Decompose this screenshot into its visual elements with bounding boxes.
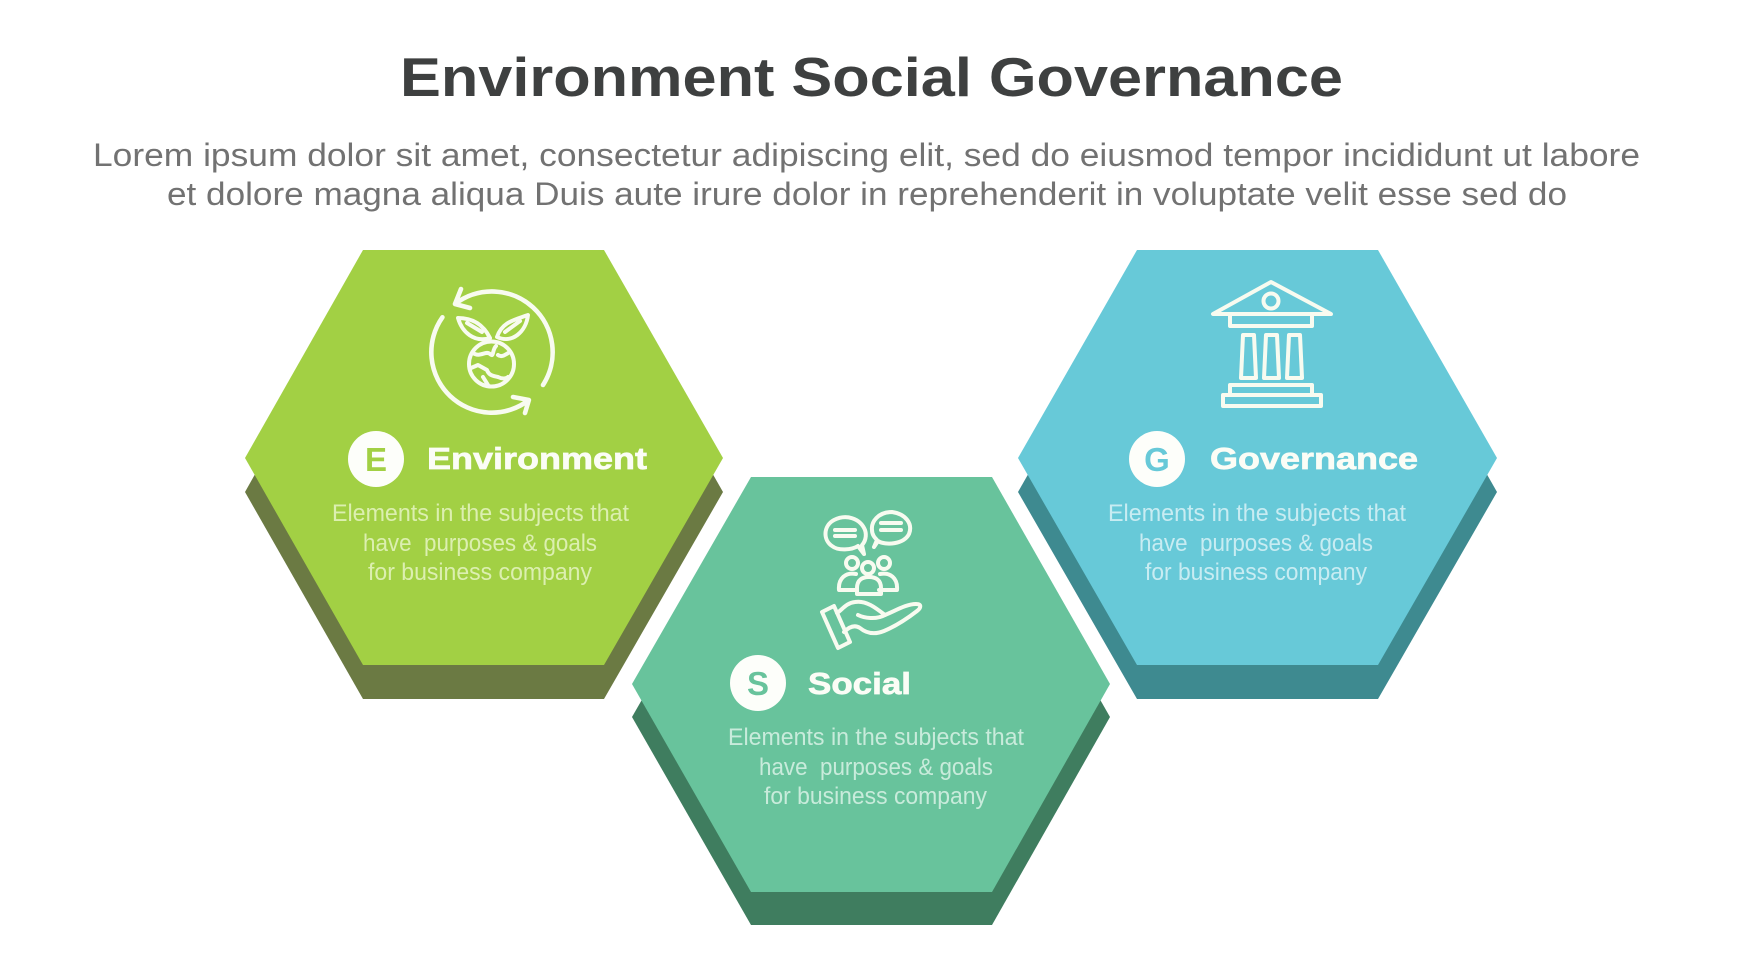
icon: globe with leaves and cycle arrows <box>431 289 553 413</box>
hexagon shadow: environment <box>245 283 723 699</box>
hexagon: environment <box>245 250 723 665</box>
panel: environment <box>245 250 723 699</box>
subtitle text: Lorem ipsum dolor sit amet, consectetur adipiscing elit, sed do eiusmod tempor incididunt ut labore <box>93 137 1640 173</box>
description: governance: Elements in the subjects that <box>1108 500 1406 527</box>
badge: E <box>348 431 404 487</box>
subtitle text: et dolore magna aliqua Duis aute irure dolor in reprehenderit in voluptate velit esse sed do <box>167 176 1567 212</box>
description: environment <box>332 500 629 586</box>
icon: government building <box>1213 282 1331 406</box>
title: Environment Social Governance <box>400 46 1343 108</box>
hexagon shadow: governance <box>1018 283 1497 699</box>
description: governance <box>1108 500 1406 586</box>
badge: S: S <box>747 665 769 702</box>
description: environment: Elements in the subjects that <box>332 500 629 527</box>
description: environment: have purposes & goals <box>363 530 597 557</box>
badge: S <box>730 655 786 711</box>
subtitle text <box>93 137 1640 212</box>
badge: E: E <box>365 441 387 478</box>
hexagon: social <box>632 477 1110 892</box>
heading: environment: Environment <box>427 441 647 476</box>
hexagon shadow: social <box>632 510 1110 925</box>
description: governance: have purposes & goals <box>1139 530 1373 557</box>
heading: social: Social <box>808 666 911 701</box>
description: social: for business company <box>764 783 987 810</box>
description: social <box>728 724 1024 810</box>
badge: G: G <box>1144 441 1170 478</box>
icon: people with speech bubbles on a hand <box>822 512 920 648</box>
heading: governance: Governance <box>1210 441 1418 476</box>
badge: G <box>1129 431 1185 487</box>
description: environment: for business company <box>368 559 592 586</box>
description: social: have purposes & goals <box>759 754 993 781</box>
panel: social <box>632 477 1110 925</box>
panel: governance <box>1018 250 1497 699</box>
description: social: Elements in the subjects that <box>728 724 1024 751</box>
hexagon: governance <box>1018 250 1497 665</box>
description: governance: for business company <box>1145 559 1367 586</box>
